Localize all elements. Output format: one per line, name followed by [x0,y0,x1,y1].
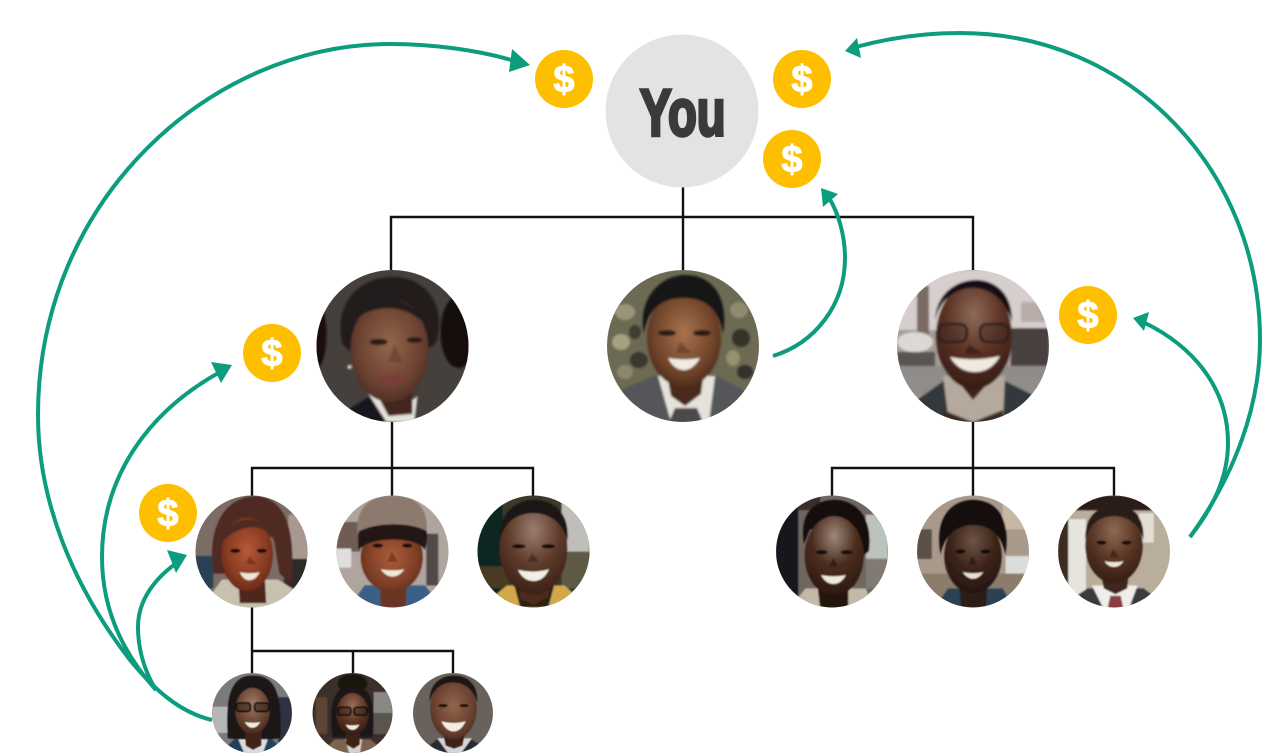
arrow: right branch to You coin [845,33,1260,537]
coin: left of level three woman [139,484,197,542]
coin: top left of You: $ [553,59,575,101]
arrow: bottom woman to first partner coin [102,362,232,690]
portrait: young man with yellow collar [477,495,590,610]
portrait: man with glasses [897,270,1049,426]
portrait: woman with head wrap [316,270,468,422]
portrait: woman with long hair and glasses [212,673,292,754]
coin: left of level three woman: $ [157,493,179,535]
arrow: middle partner to You coin [773,188,845,356]
portrait: man in cap [336,495,449,610]
portrait: smiling man in grey suit [607,270,759,426]
coin: lower right of You: $ [781,139,803,181]
portrait: girl with braids [776,495,888,610]
coin: top left of You [535,50,593,108]
arrow: bottom woman to level three coin [138,550,187,690]
coin: left of first partner: $ [261,333,283,375]
coin: top right of You [773,50,831,108]
You node [606,34,758,188]
arrow: bottom woman to You, left side [38,44,530,720]
coin: right of third partner: $ [1077,295,1099,337]
connector lines: organisation tree [252,186,1114,673]
coin: left of first partner [243,324,301,382]
coin: top right of You: $ [791,59,813,101]
coin: right of third partner [1059,286,1117,344]
portrait: man in suit and tie [1058,495,1170,610]
You node: You [640,77,726,150]
portrait: young man with curly hair [917,495,1029,610]
portrait: young woman with reddish hair [195,495,308,610]
arrow: right branch to third partner coin [1133,312,1228,537]
coin: lower right of You [763,130,821,188]
portrait: laughing man in suit [413,673,493,754]
portrait: woman with hair bun and glasses [313,673,392,754]
